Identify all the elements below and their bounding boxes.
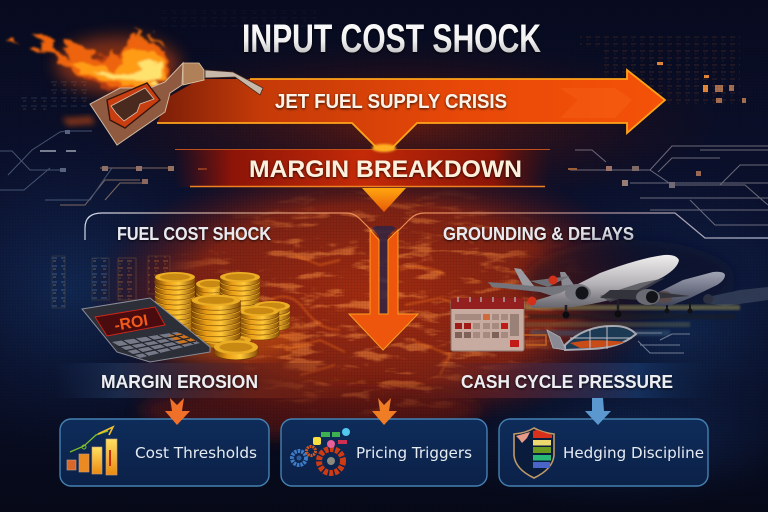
band label: CASH CYCLE PRESSURE [461, 372, 673, 392]
card: pricing triggers [281, 419, 487, 486]
coin stack back left [155, 272, 195, 335]
tail stabilizer [530, 276, 570, 287]
nozzle body [90, 63, 183, 145]
panel outline: grounding and delays [398, 213, 768, 238]
card: cost thresholds [60, 419, 269, 486]
arrow to cost thresholds [165, 398, 190, 425]
nozzle collar [183, 63, 204, 85]
sparks and embers [20, 78, 90, 113]
panel outline: fuel cost shock [85, 213, 372, 240]
coin stack back right [220, 272, 260, 311]
card label: Cost Thresholds [135, 444, 257, 462]
tail fin [514, 268, 534, 288]
landing gear [566, 300, 618, 315]
card label: Pricing Triggers [356, 444, 472, 462]
band label: MARGIN EROSION [101, 372, 258, 392]
coin stack right front [239, 306, 279, 340]
panel heading: fuel cost shock: FUEL COST SHOCK [117, 224, 271, 244]
divider line [48, 397, 720, 399]
coin stack front [192, 295, 240, 342]
panel heading: grounding and delays: GROUNDING & DELAYS [443, 224, 634, 244]
card label: Hedging Discipline [563, 444, 704, 462]
coin stack far right [254, 301, 290, 331]
margin breakdown banner [175, 144, 550, 187]
flames [5, 27, 172, 96]
icon: damaged aircraft fuselage [524, 326, 690, 353]
icon: gears and signals [292, 428, 350, 473]
fuselage [527, 255, 679, 308]
illustration: parked aircraft [488, 240, 768, 336]
calculator keys [112, 332, 200, 358]
icon: rising bar chart [67, 427, 117, 475]
coin base [203, 335, 251, 349]
main wing [488, 282, 600, 300]
third aircraft [705, 287, 768, 306]
banner label: MARGIN BREAKDOWN [249, 156, 522, 183]
arrow: jet fuel supply crisis [157, 70, 665, 148]
runway ground [525, 305, 740, 336]
arrow label: JET FUEL SUPPLY CRISIS [275, 91, 507, 113]
engines [565, 284, 591, 302]
arrow to hedging discipline [585, 398, 611, 425]
near wing [600, 290, 690, 300]
icon: flaming fuel nozzle [5, 27, 263, 145]
central down arrow [349, 226, 418, 350]
connector triangle [362, 188, 406, 212]
flame glow [56, 37, 180, 93]
band: cash cycle pressure [405, 363, 715, 398]
rear aircraft [645, 272, 725, 314]
coin stack back middle [196, 279, 226, 307]
calculator display: -ROI [113, 312, 149, 335]
dark airfield backdrop [525, 240, 735, 320]
front aircraft [488, 255, 690, 318]
dashboard illustration left [52, 256, 170, 308]
card: hedging discipline [499, 419, 708, 486]
nozzle spout [205, 70, 263, 95]
band: margin erosion [55, 363, 365, 398]
circuit traces right [568, 146, 768, 225]
nozzle handle [107, 83, 160, 128]
loose coin [214, 340, 258, 360]
circuit traces left [0, 130, 207, 205]
icon: calendar [451, 297, 524, 351]
icon: gold coin stacks [150, 272, 300, 362]
damage marks [548, 276, 558, 284]
title: INPUT COST SHOCK [242, 17, 541, 61]
icon: calculator showing -ROI [82, 298, 210, 362]
icon: shield with risk bars [514, 428, 554, 478]
arrow to pricing triggers [372, 398, 397, 425]
